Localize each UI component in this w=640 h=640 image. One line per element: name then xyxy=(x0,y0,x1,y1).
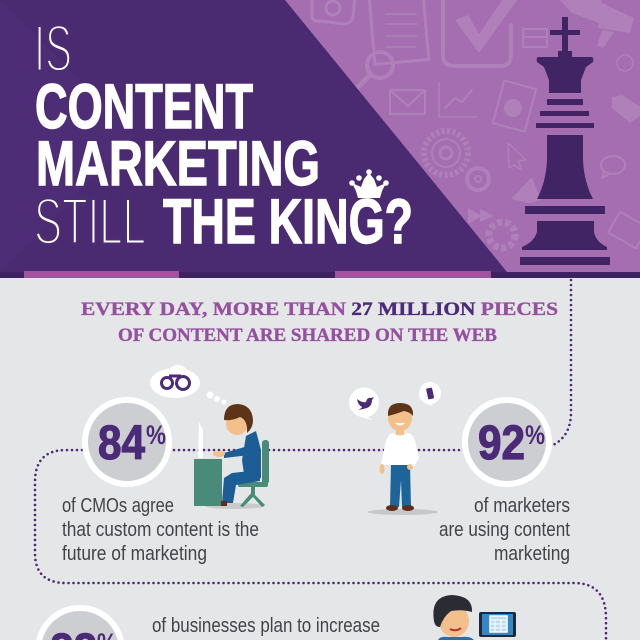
speech bubble with phone xyxy=(419,382,441,406)
description line 3: future of marketing xyxy=(62,543,207,565)
shoe xyxy=(221,501,227,506)
percent sign: % xyxy=(146,420,166,450)
description line 2: are using content xyxy=(439,519,570,541)
icon: document checklist xyxy=(369,0,429,64)
icon: binoculars xyxy=(162,376,190,390)
header background xyxy=(0,0,640,278)
title line: CONTENT: CONTENT xyxy=(35,72,253,142)
description line 1: of marketers xyxy=(474,495,570,517)
icon: envelope xyxy=(390,90,425,114)
dark purple triangle xyxy=(0,0,507,272)
icon: speech bubbles xyxy=(601,156,625,178)
stat: 92 percent xyxy=(439,400,570,565)
icon: home bubble xyxy=(617,55,633,71)
background marketing icons xyxy=(312,0,640,248)
trousers xyxy=(390,464,411,507)
head xyxy=(388,403,413,431)
stat: 84 percent xyxy=(62,400,259,565)
neck xyxy=(396,426,404,435)
thought bubble with binoculars xyxy=(150,365,226,404)
head xyxy=(224,404,253,435)
icon: speech bubble xyxy=(312,0,355,24)
icon: crown xyxy=(349,169,389,198)
bubble xyxy=(349,388,379,420)
chess king xyxy=(520,17,610,265)
subheading line 1: EVERY DAY, MORE THAN 27 MILLION PIECES xyxy=(81,300,558,320)
icon: large megaphone xyxy=(558,0,634,48)
head xyxy=(433,595,472,637)
subheading line 2: OF CONTENT ARE SHARED ON THE WEB xyxy=(118,326,497,346)
icon: check mark xyxy=(455,0,520,53)
hand xyxy=(213,451,225,457)
shoes xyxy=(386,505,414,511)
title line: MARKETING: MARKETING xyxy=(36,129,320,199)
stat circle xyxy=(85,400,169,484)
icon: small gear xyxy=(467,168,489,190)
header banner xyxy=(0,0,640,278)
tablet screen xyxy=(482,614,513,635)
dotted connector path xyxy=(35,280,606,640)
monitor xyxy=(198,422,203,458)
speech bubble with twitter bird xyxy=(349,388,379,420)
band segment left xyxy=(24,271,179,278)
icon: gear lower xyxy=(489,222,515,248)
stat circle xyxy=(465,400,549,484)
icon: cassette xyxy=(608,212,640,248)
jacket xyxy=(438,637,474,640)
icon: twitter bird xyxy=(357,397,374,410)
icon: calendar xyxy=(490,616,507,632)
icon: pie chart document xyxy=(493,81,536,132)
band segment right xyxy=(335,271,491,278)
title line: IS: IS xyxy=(34,11,72,85)
bubble cloud xyxy=(150,365,226,404)
stat circle xyxy=(38,608,122,640)
floor shadow xyxy=(205,503,265,509)
title line: STILL: STILL xyxy=(34,184,146,258)
description line 3: marketing xyxy=(494,543,570,565)
stat description xyxy=(439,495,570,565)
body in blue suit xyxy=(222,431,261,503)
stat number: 84 xyxy=(98,417,145,470)
lighter left facet xyxy=(0,0,135,272)
tablet xyxy=(479,612,516,637)
title line: THE KING?: THE KING? xyxy=(163,187,413,257)
stat number: 92 xyxy=(478,417,525,470)
icon: check box xyxy=(443,0,511,66)
bubble xyxy=(419,382,441,406)
description line 2: that custom content is the xyxy=(62,519,259,541)
figure: man with tablet xyxy=(433,595,516,640)
description line 1: of CMOs agree xyxy=(62,495,174,517)
desk xyxy=(194,459,222,506)
icon: price tag xyxy=(612,95,640,123)
title xyxy=(34,11,413,258)
subheading xyxy=(81,300,558,346)
figure: standing man xyxy=(349,382,441,515)
icon: line chart xyxy=(439,83,477,117)
stat: third partly visible xyxy=(38,608,380,640)
hands xyxy=(380,464,413,474)
floor shadow xyxy=(368,509,438,515)
icon: magnifier xyxy=(357,52,393,88)
stat description: of businesses plan to increase xyxy=(152,615,380,637)
figure: man at desk xyxy=(150,365,269,509)
percent sign: % xyxy=(525,420,545,450)
chair xyxy=(238,440,269,507)
icon: large gear xyxy=(424,131,468,175)
bottom dark band xyxy=(0,272,640,278)
stat description xyxy=(62,495,259,565)
icon: cursor xyxy=(508,143,526,170)
icon: small megaphone xyxy=(511,177,541,203)
icon: small box xyxy=(523,29,547,47)
icon: phone xyxy=(426,387,434,399)
shirt xyxy=(381,433,419,467)
icon: play arrows xyxy=(468,208,494,224)
